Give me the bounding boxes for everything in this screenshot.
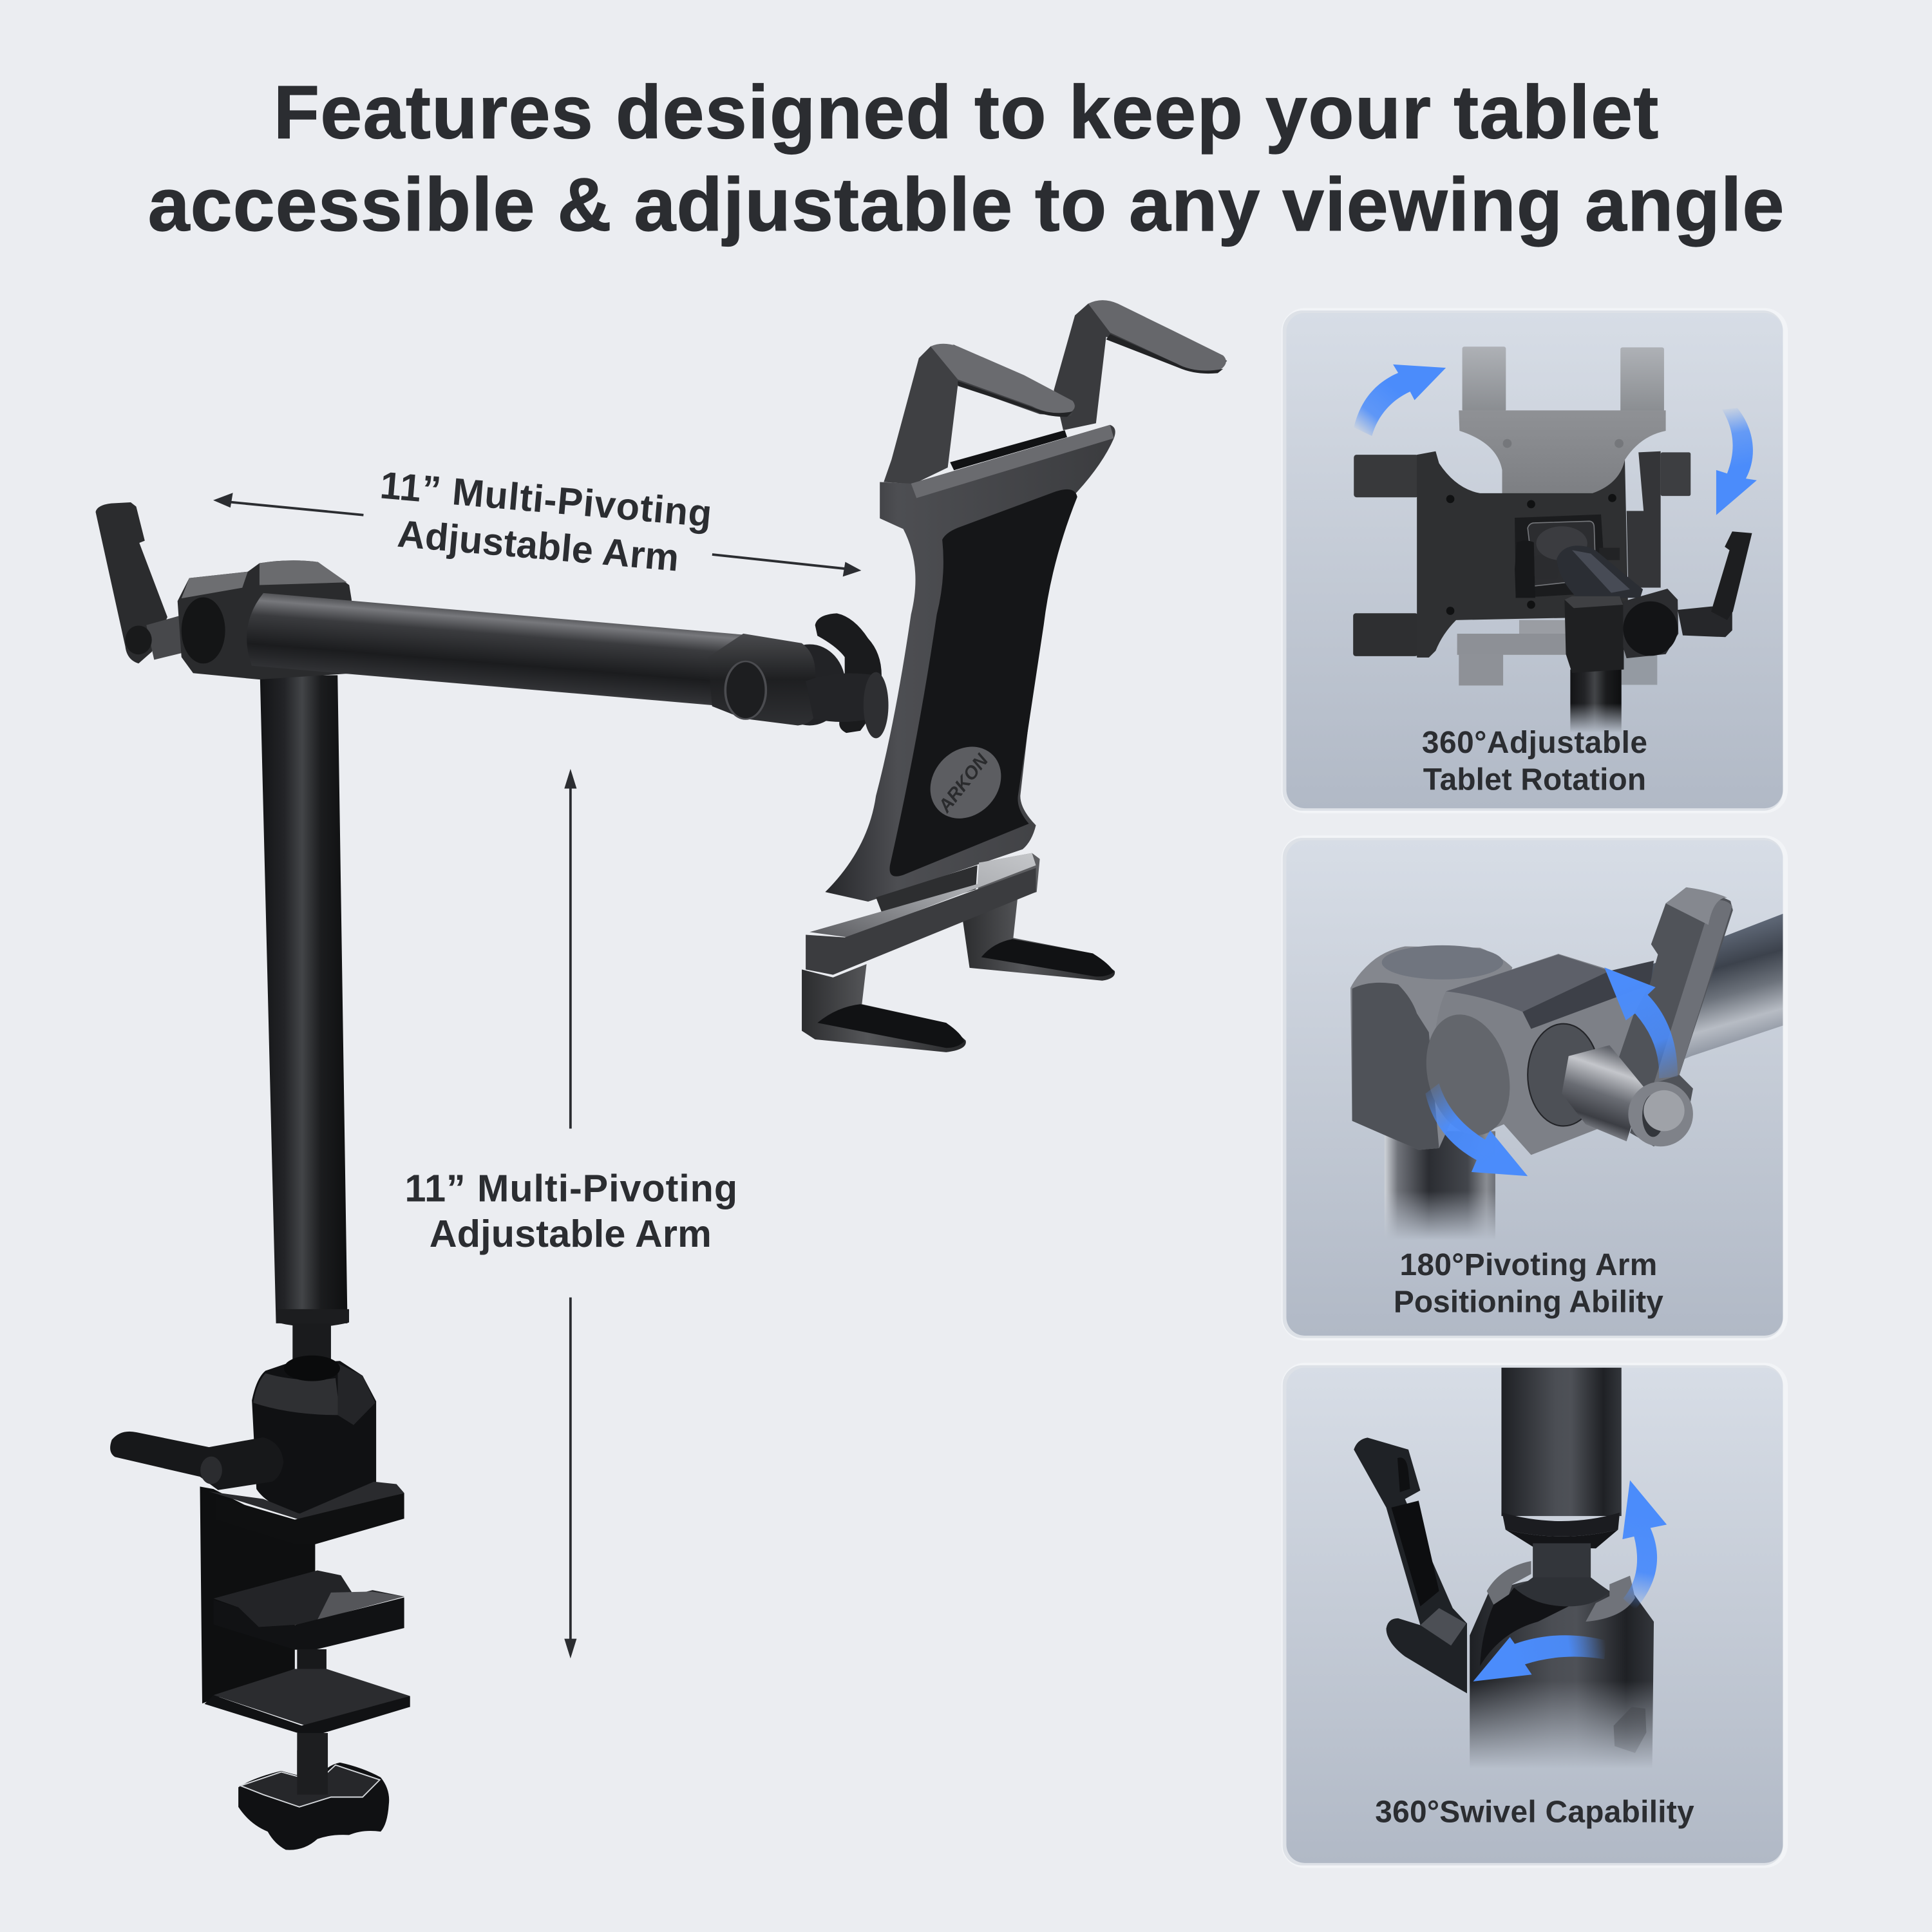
label: vertical arm: Adjustable Arm	[430, 1212, 712, 1255]
arrow: swivel around	[1473, 1635, 1606, 1681]
product: desk clamp	[110, 1309, 410, 1850]
arrow: rotate clockwise right	[1716, 408, 1757, 515]
main arm tube	[247, 593, 743, 705]
arm tube	[1651, 913, 1783, 1059]
lever block	[1414, 954, 1657, 1155]
lower neck	[277, 1309, 349, 1327]
rubber pad	[889, 489, 1077, 876]
arrow: vertical down	[564, 1298, 576, 1658]
neck	[292, 1324, 331, 1373]
logo text: ARKON	[934, 750, 993, 817]
clamp blocks	[1564, 589, 1678, 673]
knob	[238, 1750, 389, 1850]
lower pole	[1570, 670, 1622, 733]
product: horizontal arm and tablet holder	[95, 300, 1227, 1052]
arrow: swivel up	[1622, 1481, 1667, 1610]
arrow: pivot down	[1425, 1083, 1528, 1176]
label: vertical arm	[405, 1166, 737, 1255]
arrow: rotate clockwise top	[1354, 365, 1446, 436]
swivel neck flare	[1514, 1577, 1609, 1606]
title	[148, 70, 1784, 247]
caption: Positioning Ability	[1394, 1285, 1663, 1320]
label: horizontal arm: 11” Multi-Pivoting	[379, 463, 714, 535]
hex bolt	[1614, 1707, 1646, 1753]
label: vertical arm: 11” Multi-Pivoting	[405, 1166, 737, 1209]
title: Features designed to keep your tablet	[274, 70, 1658, 154]
logo oval	[921, 742, 1010, 823]
top plate	[209, 1482, 404, 1544]
bottom plate	[205, 1669, 410, 1736]
lever pin	[1628, 1082, 1693, 1146]
arrow: pivot up	[1604, 967, 1678, 1078]
arm end sleeve and ball joint	[708, 613, 889, 738]
swivel top ring	[1480, 1561, 1635, 1666]
caption	[1422, 726, 1647, 797]
label: horizontal arm: Adjustable Arm	[396, 512, 681, 580]
tablet body	[825, 425, 1115, 902]
caption: Tablet Rotation	[1423, 762, 1646, 797]
lever blade	[1613, 887, 1733, 1146]
tablet top grip arms	[884, 300, 1227, 484]
pole	[1501, 1366, 1622, 1587]
swivel body	[1470, 1578, 1654, 1779]
tablet back	[1353, 451, 1690, 658]
tablet bottom grip plates and feet	[802, 853, 1115, 1052]
caption	[1394, 1248, 1663, 1320]
caption: 360°Swivel Capability	[1375, 1795, 1694, 1830]
shaft	[1562, 1045, 1643, 1141]
panel: tablet rotation	[1282, 308, 1788, 813]
arrow: horizontal right	[712, 554, 861, 576]
pivot block	[1350, 945, 1512, 1150]
arrow: vertical up	[564, 769, 576, 1129]
lever	[1354, 1437, 1467, 1693]
wing knob and arm	[1515, 526, 1643, 598]
product: vertical pole	[260, 675, 348, 1323]
screw rod	[297, 1649, 327, 1698]
lever	[110, 1432, 283, 1490]
panel: pivoting arm	[1282, 835, 1788, 1341]
middle plate	[214, 1570, 404, 1650]
lever	[1678, 531, 1752, 637]
clamp spine	[200, 1486, 315, 1703]
lever handle, arm clamp	[95, 502, 355, 679]
ghost tablet	[1457, 346, 1666, 685]
screw rod lower	[297, 1733, 328, 1795]
label: horizontal arm	[374, 463, 714, 582]
pole	[1385, 1131, 1495, 1240]
ball head	[252, 1356, 376, 1515]
caption: 360°Adjustable	[1422, 726, 1647, 760]
caption: 180°Pivoting Arm	[1399, 1248, 1657, 1282]
mount plate	[1515, 515, 1620, 598]
arrow: horizontal left	[213, 493, 363, 515]
panel: swivel	[1282, 1363, 1788, 1868]
title: accessible & adjustable to any viewing angle	[148, 162, 1784, 247]
